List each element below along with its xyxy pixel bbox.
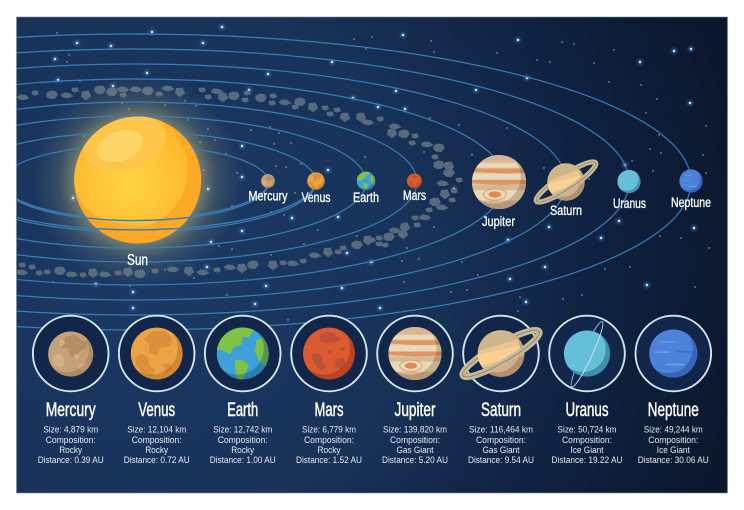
card: Uranus: Size: 50,724 km [558, 425, 616, 435]
card: Uranus: Uranus [566, 400, 608, 421]
label: Mercury: Mercury [248, 188, 288, 204]
card: Saturn: Saturn [481, 400, 521, 421]
card: Mercury [33, 316, 109, 465]
label: Mars: Mars [403, 188, 426, 203]
card: Mercury: Composition: [46, 435, 96, 445]
card: Venus: Distance: 0.72 AU [124, 455, 190, 465]
asteroid belt [16, 85, 463, 278]
card: Mercury: Distance: 0.39 AU [38, 455, 104, 465]
card: Uranus: Distance: 19.22 AU [552, 455, 622, 465]
planet: Jupiter small [467, 150, 530, 213]
label: Venus: Venus [302, 190, 331, 205]
card: Jupiter: Size: 139,820 km [383, 425, 447, 435]
card: Venus: Size: 12,104 km [127, 425, 186, 435]
card: Uranus: Composition: [562, 435, 612, 445]
card: Mars: Rocky [318, 445, 341, 455]
card: Mars [291, 316, 367, 465]
card: Uranus [549, 316, 625, 465]
card: Earth: Distance: 1.00 AU [210, 455, 276, 465]
card: Mercury: Rocky [59, 445, 83, 455]
star field [50, 22, 710, 321]
card: Saturn: Gas Giant [482, 445, 520, 455]
planet: Neptune small [677, 167, 704, 194]
label: Uranus: Uranus [613, 196, 646, 211]
card: Jupiter: Composition: [390, 435, 440, 445]
card: Earth: Size: 12,742 km [213, 425, 272, 435]
card: Neptune: Ice Giant [657, 445, 690, 455]
card: Venus: Rocky [145, 445, 169, 455]
card: Saturn [458, 316, 544, 465]
planet: Venus small [305, 170, 326, 191]
card: Venus: Composition: [132, 435, 182, 445]
card: Neptune: Neptune [648, 400, 699, 421]
card: Uranus: Ice Giant [570, 445, 604, 455]
planet: Mercury small [260, 173, 276, 189]
card: Jupiter: Jupiter [394, 400, 436, 421]
label: Neptune: Neptune [671, 195, 711, 210]
planet: Mars small [406, 172, 423, 190]
planet: Uranus small [615, 168, 642, 195]
card: Jupiter: Distance: 5.20 AU [382, 455, 448, 465]
card: Mars: Composition: [304, 435, 354, 445]
card: Mars: Distance: 1.52 AU [296, 455, 362, 465]
card: Neptune: Composition: [648, 435, 698, 445]
label: Earth: Earth [353, 190, 379, 205]
card: Earth [205, 316, 280, 465]
card: Saturn: Distance: 9.54 AU [468, 455, 534, 465]
card: Venus [119, 316, 194, 465]
card: Jupiter [377, 316, 453, 465]
sun glow [32, 74, 244, 286]
card: Mars: Mars [314, 400, 344, 421]
card: Earth: Earth [227, 400, 258, 421]
card: Mercury: Mercury [46, 400, 96, 421]
card: Earth: Composition: [218, 435, 268, 445]
label: Jupiter: Jupiter [482, 214, 515, 229]
card: Neptune [636, 316, 711, 465]
card: Mercury: Size: 4,879 km [43, 425, 98, 435]
planet: Earth small [355, 170, 377, 192]
label: Saturn: Saturn [550, 203, 582, 218]
card: Saturn: Size: 116,464 km [469, 425, 533, 435]
sun [16, 116, 314, 244]
label: Sun: Sun [127, 252, 148, 269]
card: Neptune: Size: 49,244 km [644, 425, 703, 435]
card: Jupiter: Gas Giant [396, 445, 434, 455]
card: Neptune: Distance: 30.06 AU [638, 455, 709, 465]
orbit lines [0, 34, 691, 330]
planet: Saturn small [531, 156, 601, 208]
card: Venus: Venus [138, 400, 175, 421]
card: Mars: Size: 6,779 km [302, 425, 356, 435]
card: Saturn: Composition: [476, 435, 526, 445]
card: Earth: Rocky [231, 445, 255, 455]
